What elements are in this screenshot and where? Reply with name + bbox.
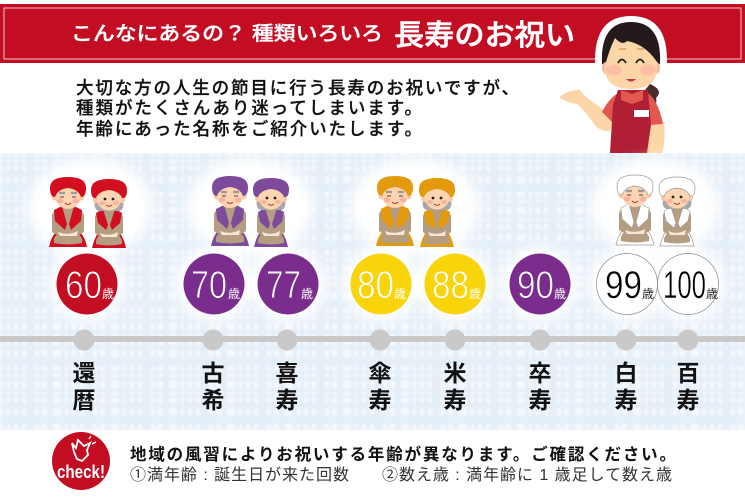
- age badge 90: 歳: [554, 287, 566, 301]
- age badge 99: 99: [605, 264, 642, 307]
- age badge 77: 歳: [301, 287, 313, 301]
- age badge 90: [510, 254, 570, 314]
- label: kanreki: [72, 360, 96, 413]
- label: sanju: [368, 360, 392, 413]
- intro text: [76, 78, 519, 139]
- label: hyakuju: 百: [676, 360, 700, 386]
- note: definitions: [130, 466, 672, 484]
- figures: golden elders: [376, 176, 455, 247]
- banner main title: 長寿のお祝い: [394, 19, 575, 52]
- age badge 100: [658, 254, 718, 314]
- plaid background band: [0, 153, 745, 430]
- label: hakuju: [614, 360, 638, 413]
- label: hyakuju: 寿: [676, 387, 700, 413]
- intro text: 種類がたくさんあり迷ってしまいます。: [76, 98, 422, 118]
- label: sotsuju: [528, 360, 552, 413]
- age badge 60: [56, 254, 118, 314]
- timeline: [0, 330, 745, 350]
- age badge 60: 歳: [102, 287, 114, 301]
- icon: check badge: check!: [57, 462, 105, 482]
- label: beiju: [444, 360, 466, 413]
- age badge 70: 70: [191, 264, 227, 307]
- age badge 77: 77: [266, 264, 301, 307]
- label: kanreki: 還: [72, 360, 96, 386]
- age badge 80: 歳: [394, 287, 406, 301]
- label: sotsuju: 卒: [528, 360, 552, 386]
- note: definitions: ②数え歳 : 満年齢に 1 歳足して数え歳: [382, 466, 672, 484]
- intro text: 大切な方の人生の節目に行う長寿のお祝いですが、: [76, 78, 519, 98]
- label: kanreki: 暦: [72, 387, 96, 413]
- label: kiju: 喜: [276, 360, 298, 386]
- label: beiju: 寿: [444, 387, 466, 413]
- label: hakuju: 白: [614, 360, 638, 386]
- age badge 100: 100: [663, 264, 706, 307]
- age badge 70: 歳: [228, 287, 240, 301]
- figures: purple elders: [211, 176, 289, 247]
- age badge 80: 80: [357, 264, 394, 307]
- label: hakuju: 寿: [614, 387, 638, 413]
- age badge 80: [350, 254, 412, 314]
- figures: white elders: [616, 175, 695, 246]
- label: sanju: 寿: [368, 387, 392, 413]
- label: kiju: 寿: [276, 387, 298, 413]
- note: definitions: ①満年齢 : 誕生日が来た回数: [130, 466, 349, 484]
- label: koki: 古: [202, 360, 224, 386]
- label: koki: 希: [202, 387, 224, 413]
- age badge 90: 90: [517, 264, 554, 307]
- age badge 70: [184, 254, 244, 314]
- white halos behind figures: [28, 159, 725, 321]
- label: sanju: 傘: [368, 360, 392, 386]
- label: beiju: 米: [444, 360, 466, 386]
- age badge 88: 歳: [469, 287, 481, 301]
- intro text: 年齢にあった名称をご紹介いたします。: [76, 119, 422, 139]
- age badge 99: [596, 254, 658, 314]
- icon: check badge: [52, 432, 110, 490]
- age badge 60: 60: [65, 264, 102, 307]
- age badge 100: 歳: [706, 287, 718, 301]
- icon: shop woman presenting: [559, 16, 667, 153]
- age badge 99: 歳: [642, 287, 654, 301]
- age badge 77: [258, 254, 318, 314]
- label: koki: [202, 360, 224, 413]
- banner subtitle: こんなにあるの？ 種類いろいろ: [71, 23, 383, 45]
- label: sotsuju: 寿: [528, 387, 552, 413]
- label: hyakuju: [676, 360, 700, 413]
- title banner: [0, 4, 745, 63]
- note: heading line: 地域の風習によりお祝いする年齢が異なります。ご確認ください。: [130, 444, 676, 464]
- label: kiju: [276, 360, 298, 413]
- age badge 88: [424, 254, 486, 314]
- age badge 88: 88: [432, 264, 469, 307]
- figures: red elders: [49, 177, 127, 248]
